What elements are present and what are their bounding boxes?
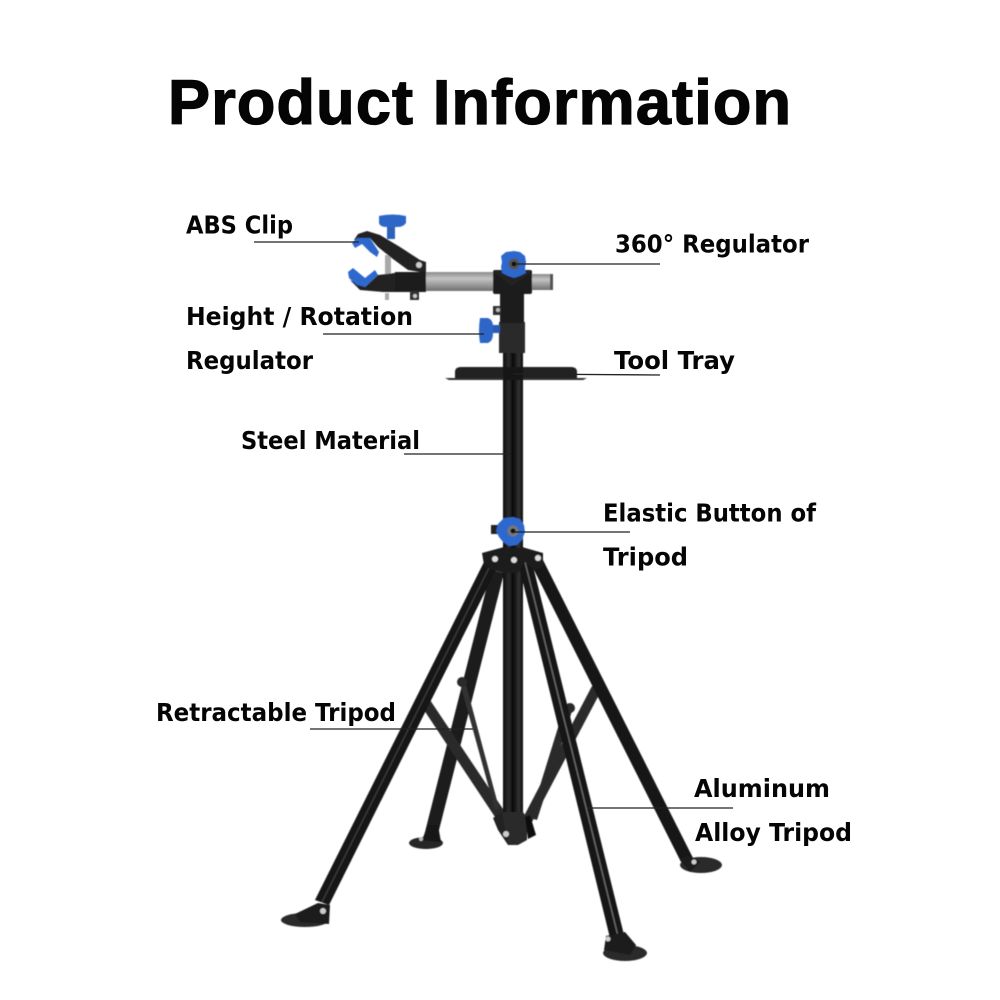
product illustration: bike repair stand [281,214,722,961]
folding braces [420,677,607,822]
label: Height / Rotation Regulator: Height / Rotation [186,302,413,331]
label: ABS Clip: ABS Clip [186,210,293,240]
front right leg [518,558,647,961]
label: 360° Regulator: 360° Regulator [615,230,810,258]
sleeve and T joint [493,270,532,353]
leader line: tool tray [513,374,660,375]
label: Elastic Button of Tripod: Tripod [603,542,688,572]
icon: height and rotation knob [479,318,500,343]
leader line: height and rotation [323,333,484,335]
icon: 360 regulator knob [501,251,526,278]
leader line: steel material [404,453,511,455]
leader line: ABS clip [254,241,359,243]
label: Aluminum Alloy Tripod: Aluminum [694,774,830,803]
icon: ABS clip [348,214,426,300]
centre lower pole [503,570,523,815]
label: Elastic Button of Tripod: Elastic Button of [603,498,817,528]
bottom hub [493,812,536,845]
label: Steel Material: Steel Material [241,426,420,455]
back left leg [409,570,504,849]
label: Aluminum Alloy Tripod [694,774,852,847]
label: Height / Rotation Regulator: Regulator [186,346,314,375]
label: Height / Rotation Regulator [186,302,413,375]
far right leg [530,558,722,873]
silver arm tube [425,272,553,291]
label: Retractable Tripod: Retractable Tripod [156,698,396,727]
label: Tool Tray: Tool Tray [614,346,735,375]
label: Elastic Button of Tripod [603,498,817,572]
leader line: elastic button [513,531,630,533]
front left leg [281,558,499,927]
upper pole [503,350,523,548]
leader line: 360 regulator [514,263,660,265]
leader line: retractable tripod [310,728,473,730]
title: Product Information [168,68,791,138]
leader line: aluminum alloy tripod [588,807,733,809]
top leg hub [482,547,543,573]
label: Aluminum Alloy Tripod: Alloy Tripod [695,818,852,847]
icon: elastic button knob [491,517,525,546]
tool tray [445,367,587,388]
